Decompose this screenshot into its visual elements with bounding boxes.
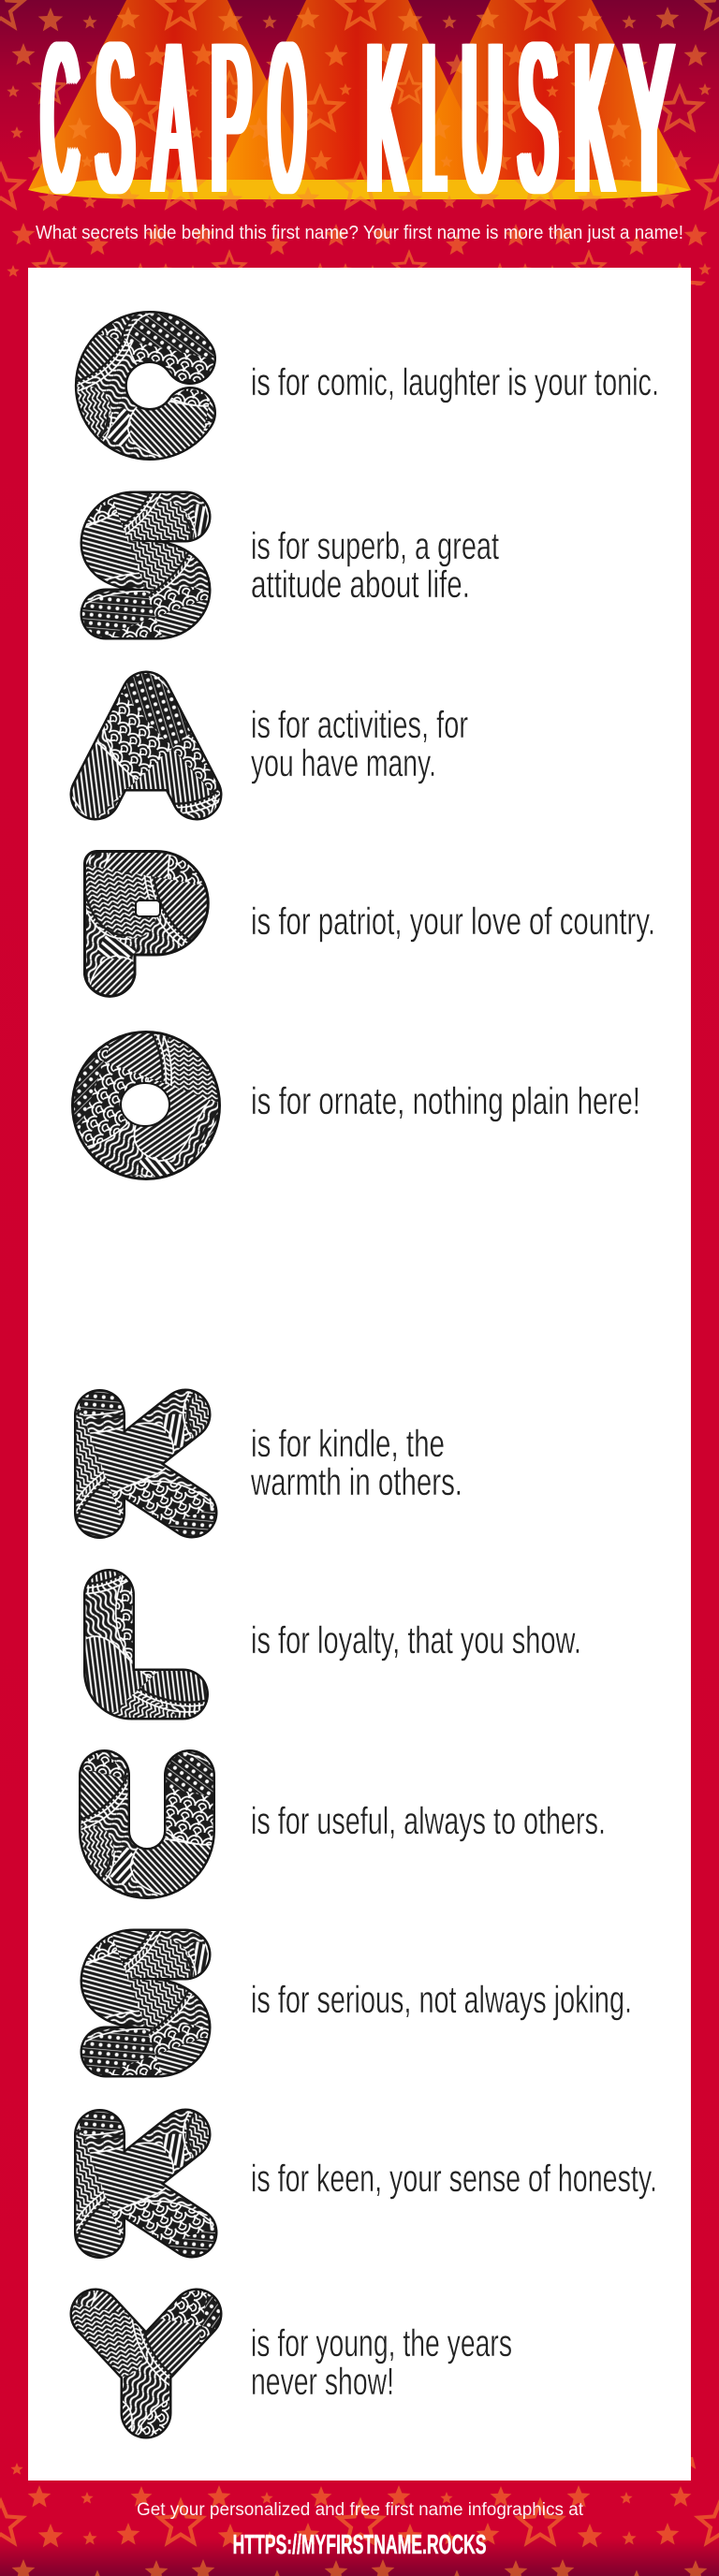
star pattern bottom <box>0 2457 719 2576</box>
text: K lines: is for kindle, the <box>251 1422 445 1465</box>
icon: letter S <box>106 517 185 614</box>
text: A lines: you have many. <box>251 741 436 784</box>
title: S <box>95 0 133 238</box>
row: P <box>84 852 655 996</box>
icon: letter O <box>73 1032 219 1179</box>
star pattern top <box>0 0 719 285</box>
icon: letter L <box>109 1595 183 1694</box>
row: K <box>99 1414 462 1513</box>
text: S lines <box>251 524 499 606</box>
row: S second <box>106 1954 632 2052</box>
icon: letter S <box>106 1954 185 2052</box>
icon: letter P <box>84 852 208 996</box>
row: Y <box>95 2314 512 2413</box>
subtitle: What secrets hide behind this first name? Your first name is more than just a name! <box>36 223 683 243</box>
panel: white letters panel <box>28 268 691 2481</box>
footer text: Get your personalized and free first name infographics at <box>137 2500 584 2520</box>
row: U <box>105 1775 606 1874</box>
title: S <box>519 0 556 238</box>
title: C <box>42 0 78 238</box>
title: L <box>424 0 445 238</box>
text: A lines <box>251 703 468 784</box>
text: L line: is for loyalty, that you show. <box>251 1618 581 1661</box>
row: L <box>109 1595 581 1694</box>
icon: letter C <box>101 337 190 434</box>
title: U <box>462 0 502 238</box>
title <box>39 0 676 238</box>
icon: letter A <box>95 696 197 795</box>
row: A <box>95 696 468 795</box>
text: K lines: warmth in others. <box>250 1460 462 1503</box>
text: Y lines: is for young, the years <box>251 2321 512 2364</box>
icon: letter Y <box>95 2314 197 2413</box>
footer url: HTTPS://MYFIRSTNAME.ROCKS <box>232 2530 487 2560</box>
title: P <box>212 0 251 238</box>
text: Y lines: never show! <box>251 2360 394 2403</box>
row: S <box>106 517 499 614</box>
title: Y <box>625 0 673 238</box>
spotlights <box>28 0 691 199</box>
title: K <box>575 0 612 238</box>
text: S lines: attitude about life. <box>251 563 470 606</box>
title: O <box>270 0 305 238</box>
row: C <box>101 337 659 434</box>
icon: letter U <box>105 1775 189 1874</box>
text: Y lines <box>251 2321 512 2403</box>
title: K <box>367 0 405 238</box>
text: A lines: is for activities, for <box>251 703 468 746</box>
icon: letter K <box>99 1414 192 1513</box>
row: K second <box>99 2134 657 2233</box>
icon: letter K <box>99 2134 192 2233</box>
text: S lines: is for superb, a great <box>251 524 499 567</box>
title: A <box>154 0 193 238</box>
row: O <box>73 1032 640 1179</box>
text: K lines <box>250 1422 462 1503</box>
